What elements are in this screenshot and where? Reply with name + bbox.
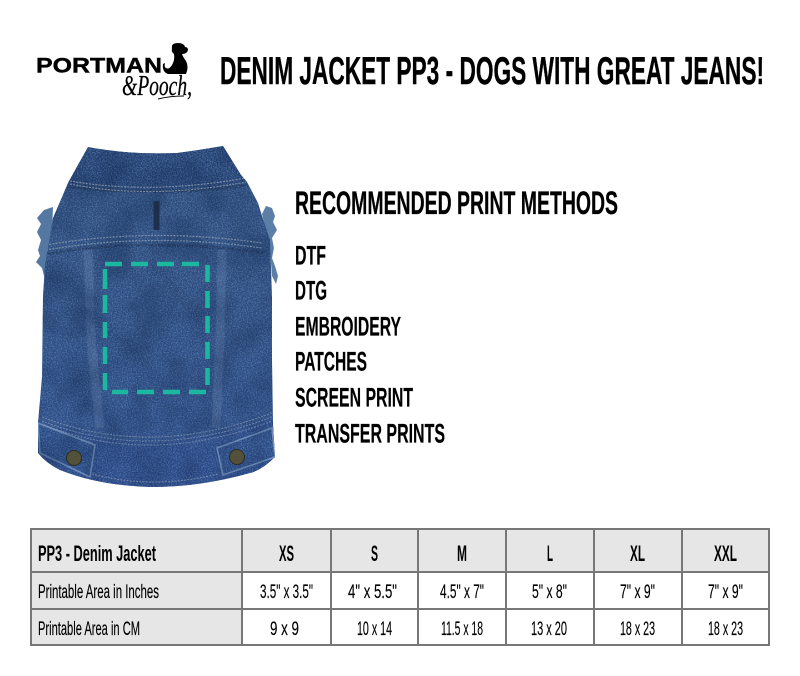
vertical panel seams xyxy=(88,250,222,428)
right frayed sleeve edge xyxy=(262,206,278,284)
table row: centimetres: 13 x 20 xyxy=(531,619,567,640)
collar shadow xyxy=(68,185,247,192)
table header row: S xyxy=(371,541,378,566)
left frayed sleeve edge xyxy=(36,207,53,276)
waistband xyxy=(38,416,275,487)
table row: inches: 4" x 5.5" xyxy=(348,582,397,603)
fabric fading xyxy=(38,146,273,487)
print methods list: DTG xyxy=(295,276,327,306)
table row: centimetres: 11.5 x 18 xyxy=(441,619,483,640)
yoke panel shadow xyxy=(46,245,264,254)
printable area dashed outline xyxy=(105,264,208,392)
table header row xyxy=(38,541,737,566)
table row: centimetres xyxy=(38,619,743,640)
table row: inches: 7" x 9" xyxy=(620,582,655,603)
size table xyxy=(31,529,769,645)
table row: centimetres: Printable Area in CM xyxy=(38,619,140,640)
print methods list: TRANSFER PRINTS xyxy=(295,418,445,448)
print methods list: SCREEN PRINT xyxy=(295,382,413,412)
left button xyxy=(66,450,82,466)
print methods list: EMBROIDERY xyxy=(295,312,401,342)
table row: inches: Printable Area in Inches xyxy=(38,582,159,603)
table header row: M xyxy=(457,541,467,566)
table grid xyxy=(31,529,769,645)
jacket body xyxy=(38,146,275,487)
table row: centimetres: 9 x 9 xyxy=(270,619,299,640)
waistband stitching xyxy=(42,413,272,445)
hanger tag xyxy=(154,201,160,230)
collar stitching xyxy=(70,178,246,192)
jacket illustration xyxy=(30,140,285,495)
table header row: XXL xyxy=(714,541,737,566)
table shading xyxy=(31,529,769,645)
yoke stitching xyxy=(46,235,262,250)
right cuff tab xyxy=(217,428,275,475)
print methods list: PATCHES xyxy=(295,346,367,376)
logo: Portman & Pooch xyxy=(36,43,192,102)
fabric grain xyxy=(38,146,275,487)
collar xyxy=(68,146,247,194)
icon: poodle silhouette xyxy=(163,43,188,74)
table row: inches: 7" x 9" xyxy=(708,582,743,603)
table row: inches: 5" x 8" xyxy=(532,582,567,603)
table row: centimetres: 18 x 23 xyxy=(708,619,743,640)
logo wordmark: PORTMAN xyxy=(36,54,162,78)
table row: inches xyxy=(38,582,743,603)
table row: centimetres: 10 x 14 xyxy=(357,619,392,640)
table row: centimetres: 18 x 23 xyxy=(620,619,655,640)
table header row: PP3 - Denim Jacket xyxy=(38,541,156,566)
right button xyxy=(230,450,244,464)
print methods list xyxy=(295,240,445,448)
table header row: XS xyxy=(279,541,294,566)
table header row: XL xyxy=(630,541,645,566)
print methods list: DTF xyxy=(295,240,326,270)
table row: inches: 3.5" x 3.5" xyxy=(260,582,313,603)
logo script: &Pooch, xyxy=(122,71,192,102)
table header row: L xyxy=(547,541,553,566)
table row: inches: 4.5" x 7" xyxy=(440,582,484,603)
left cuff tab xyxy=(38,423,95,477)
